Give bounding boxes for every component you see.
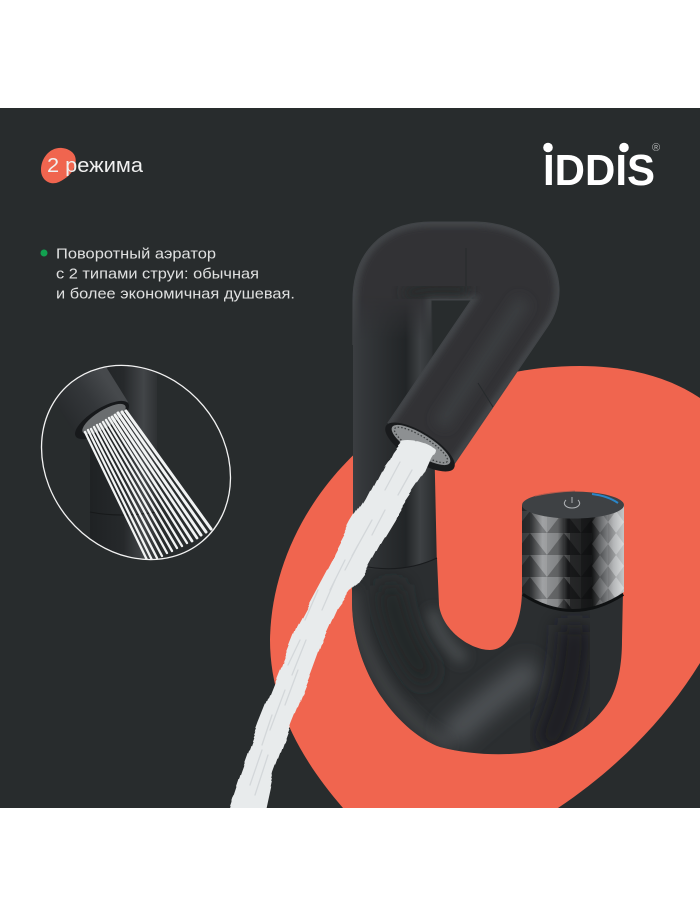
faucet <box>228 210 624 815</box>
temperature marks <box>535 491 575 496</box>
logo: IDDIS <box>543 142 660 195</box>
heading: 2 режима <box>41 148 144 183</box>
dark panel background <box>0 108 700 808</box>
description text: и более экономичная душевая. <box>56 286 295 302</box>
inset: shower spray detail <box>40 364 232 560</box>
description text <box>56 246 295 302</box>
description text: Поворотный аэратор <box>56 246 216 262</box>
water stream <box>228 441 434 815</box>
control knob <box>522 491 624 620</box>
faucet stem <box>353 340 437 570</box>
inset outline <box>2 327 270 598</box>
power icon <box>564 497 580 508</box>
upper stem blending under the bend <box>353 314 432 345</box>
description text: с 2 типами струи: обычная <box>56 266 259 282</box>
heading coral blob <box>41 148 76 183</box>
green bullet <box>40 250 48 256</box>
infographic canvas <box>0 108 700 808</box>
knob collar <box>523 594 623 610</box>
inset image content <box>68 367 213 559</box>
faucet spout arm <box>352 222 560 464</box>
knob top <box>522 492 624 518</box>
faucet lower J-shaped body <box>352 558 623 754</box>
heading text: 2 режима <box>47 155 144 177</box>
registered mark: ® <box>652 142 660 154</box>
logo i dots <box>543 143 629 152</box>
bullet description <box>40 246 295 302</box>
aerator end <box>385 422 455 472</box>
knob faceted side <box>522 505 624 609</box>
logo wordmark: IDDIS <box>543 146 655 195</box>
coral blob background <box>270 366 700 808</box>
